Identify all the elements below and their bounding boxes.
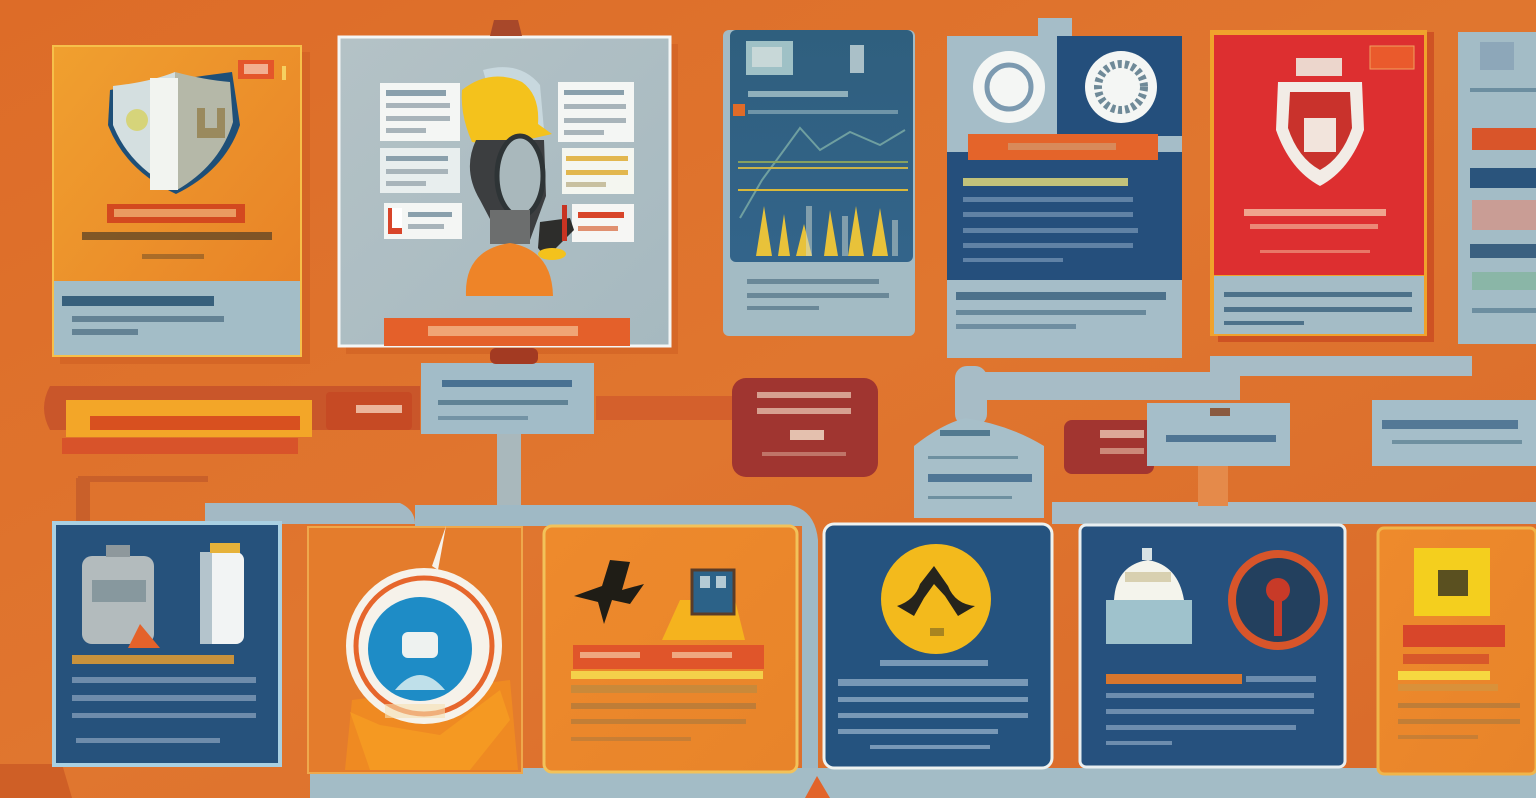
pipes right [955, 356, 1536, 524]
heading bar [573, 645, 764, 669]
timeline band left [44, 386, 420, 522]
arrow: band middle [596, 396, 740, 420]
panel: seal [308, 526, 522, 773]
line chart [738, 128, 908, 218]
callout: blue label [421, 348, 594, 434]
callout: red small [1064, 420, 1154, 474]
badge [238, 60, 286, 80]
heading [107, 204, 245, 223]
text block [1398, 671, 1520, 739]
notes left [380, 83, 462, 239]
caption [956, 292, 1166, 329]
text block [82, 232, 272, 259]
heading [1106, 674, 1242, 684]
icon: red shield [1276, 58, 1364, 186]
panel frame bottom [205, 503, 415, 524]
heading bar [968, 134, 1158, 160]
icon: seal badge [346, 526, 502, 724]
callout: gray tag [914, 418, 1044, 518]
icon: warning disc [881, 544, 991, 654]
heading bar [384, 318, 630, 346]
text block [1244, 209, 1386, 253]
text block [1106, 676, 1316, 745]
top pin [490, 20, 522, 36]
heading [1403, 625, 1505, 664]
icon: round badge right [1085, 51, 1157, 123]
text block [963, 178, 1138, 262]
icon: envelope stack [1106, 548, 1192, 644]
callout: light label [1147, 403, 1290, 466]
caption [1224, 292, 1412, 325]
vertical connector [497, 434, 521, 510]
bar chart [756, 206, 888, 256]
panel: shield card [53, 46, 310, 364]
panel: right edge card [1458, 32, 1536, 344]
panel: envelope and gauge [1080, 525, 1345, 767]
panel: orange runner [544, 526, 797, 772]
text block [571, 671, 763, 741]
text block [72, 677, 256, 743]
heading [72, 655, 234, 664]
callout: dark red [732, 378, 878, 477]
tag [1370, 46, 1414, 69]
notes right [558, 82, 634, 242]
panel: blue card with two badges [947, 18, 1182, 358]
icon: gauge [1232, 554, 1324, 646]
panel: red card [1210, 30, 1434, 342]
icon: yellow sign [1414, 548, 1490, 616]
panel: right orange [1378, 528, 1536, 774]
panel: warning icon [824, 524, 1052, 768]
text block [838, 660, 1028, 749]
icon: shield [108, 72, 240, 194]
caption [747, 279, 889, 310]
icon: cylinder [200, 543, 244, 644]
icon: worker with helmet and mask [462, 67, 574, 296]
panel: chart card [723, 30, 915, 336]
panel: blue cylinders [54, 523, 280, 765]
caption [62, 296, 224, 335]
icon: tank [82, 545, 160, 648]
panel: respirator worker [339, 20, 678, 354]
icon: round badge left [973, 51, 1045, 123]
icon: runner [574, 560, 644, 624]
icon: machine [662, 570, 745, 640]
callout: right label [1372, 400, 1536, 466]
